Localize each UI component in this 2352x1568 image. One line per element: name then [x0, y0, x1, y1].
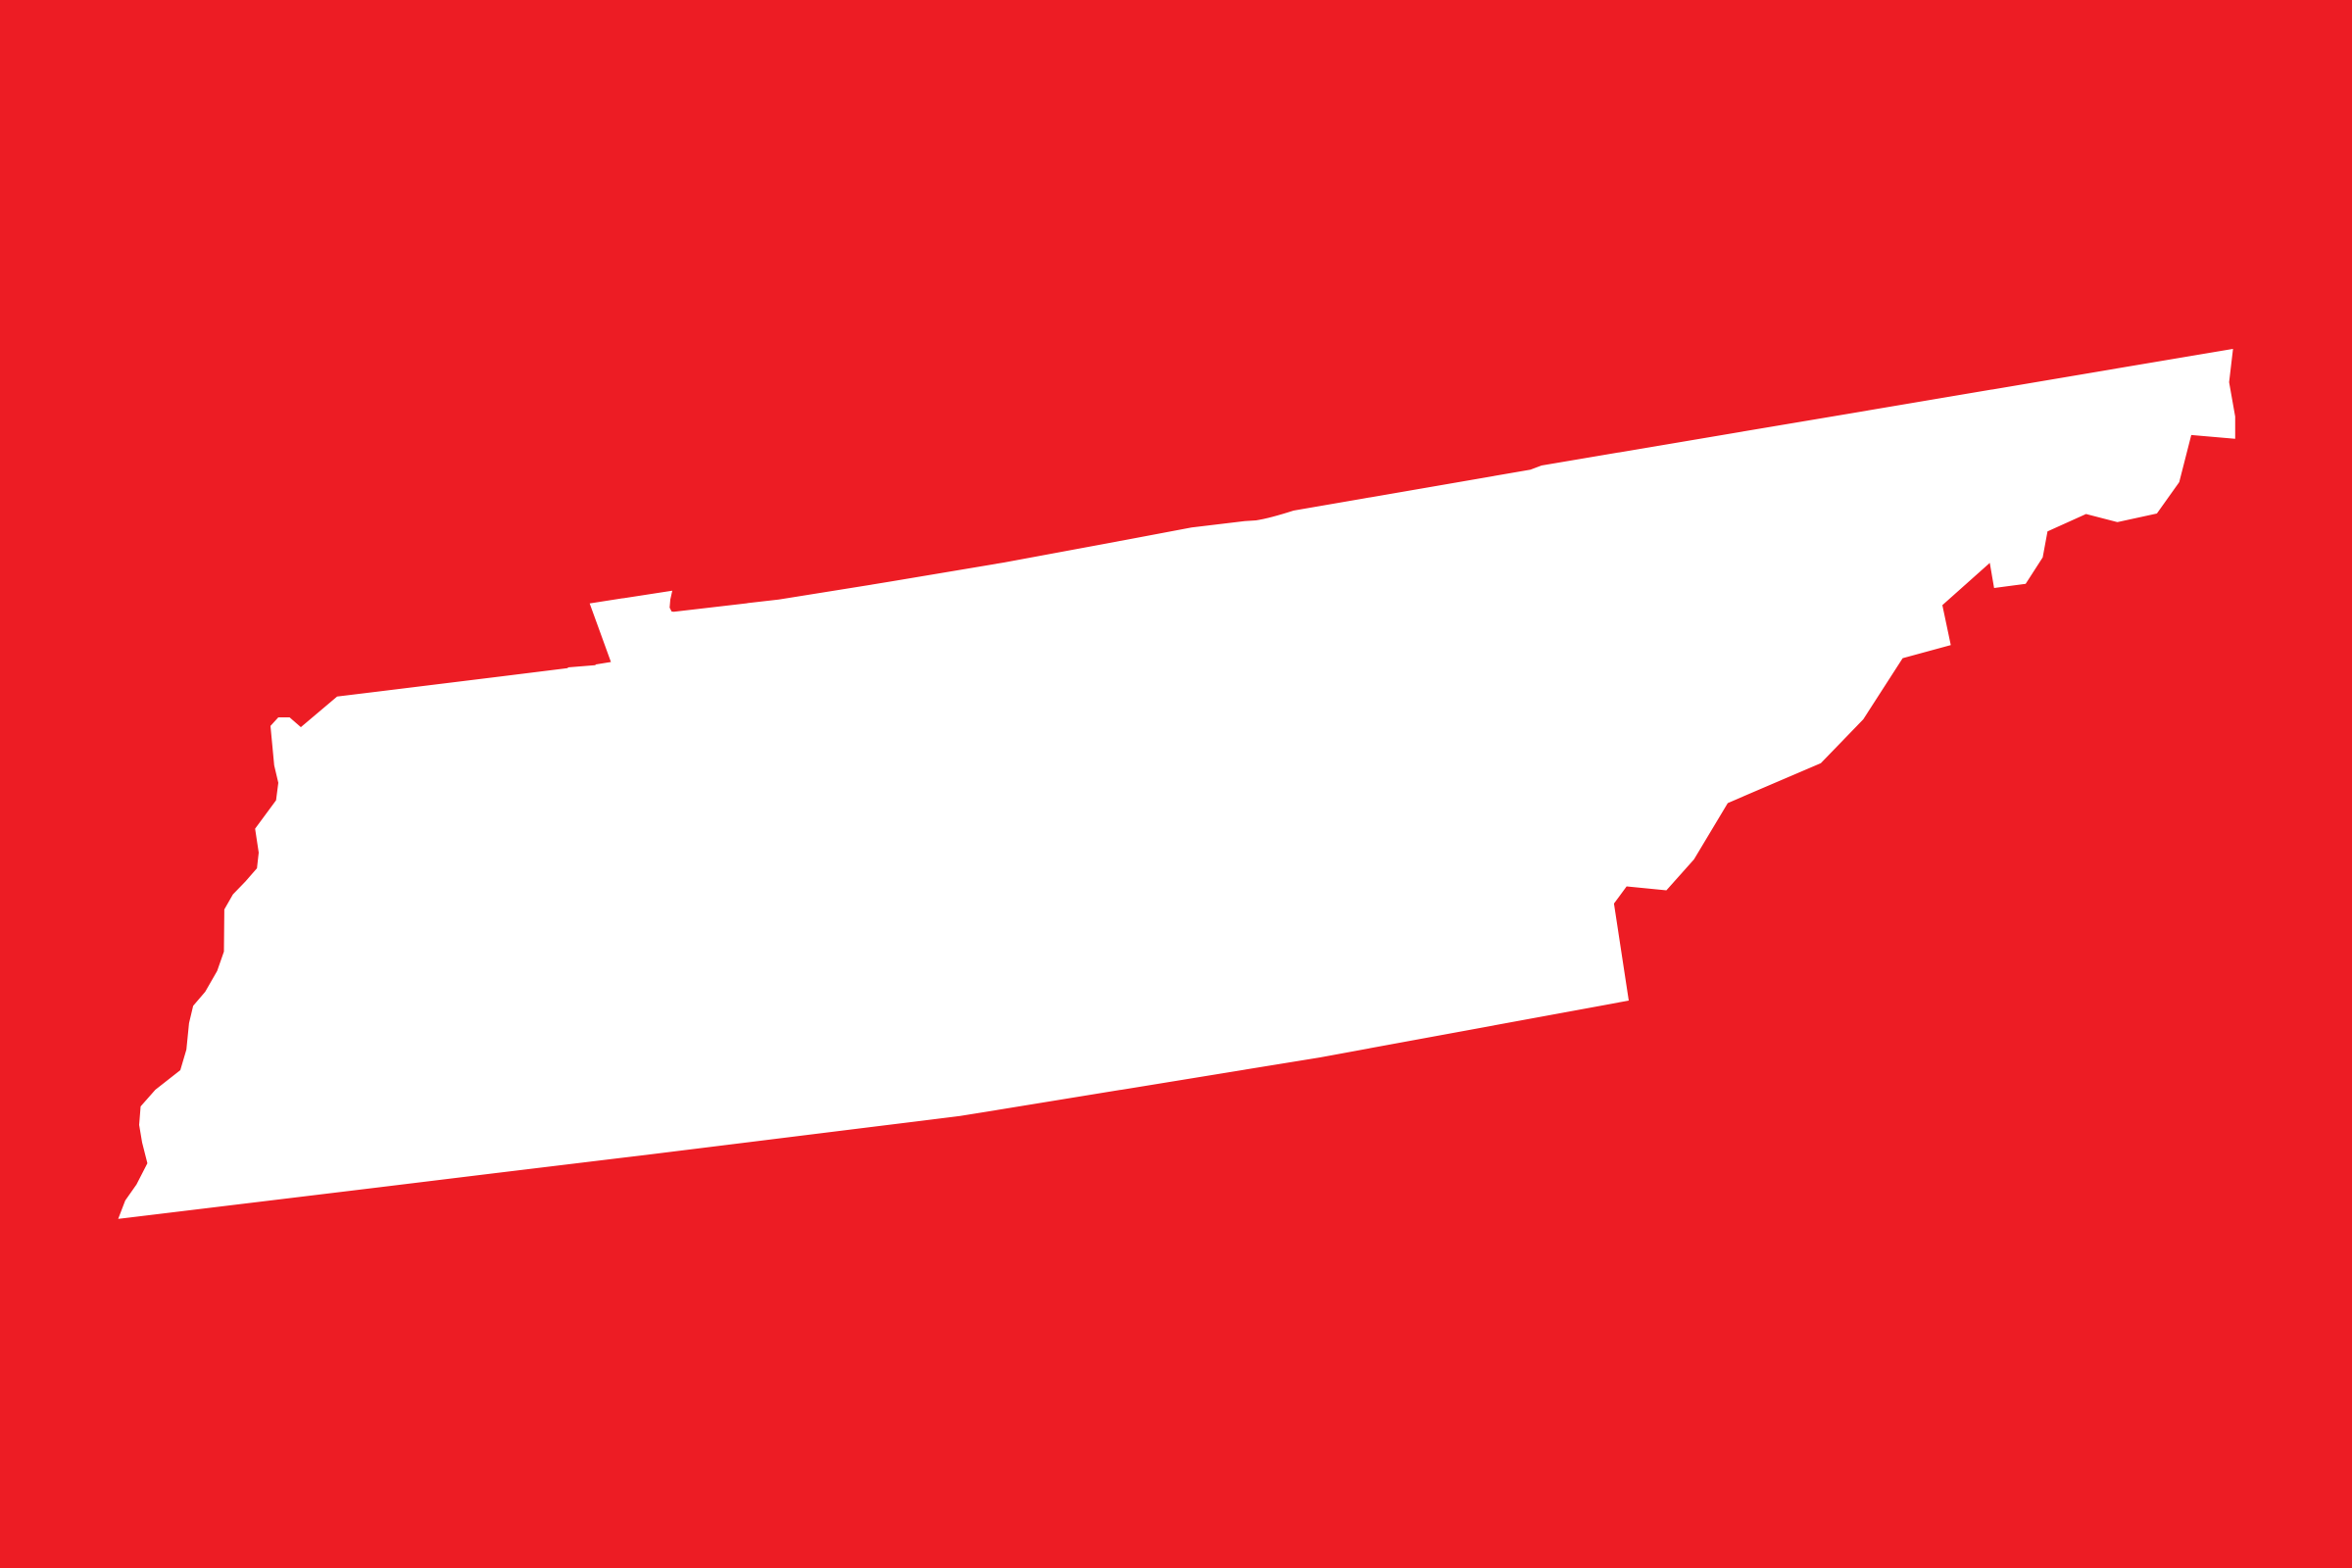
icon: white state silhouette [119, 349, 2235, 1219]
